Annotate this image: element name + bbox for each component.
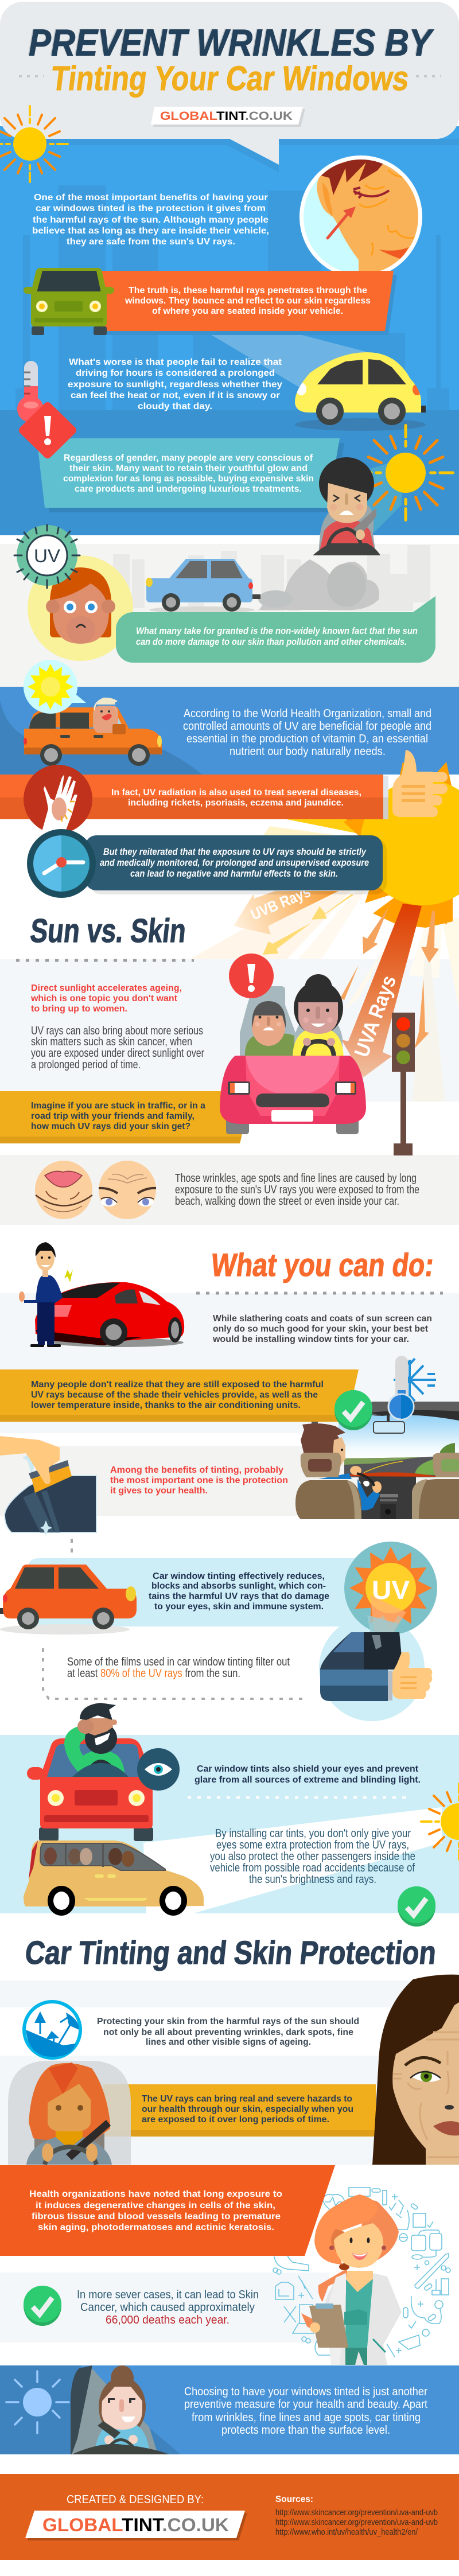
panel: footer xyxy=(0,2474,459,2560)
panel: gray tinting benefit band xyxy=(0,1433,459,1516)
text block: UV rays serious xyxy=(31,1025,204,1071)
panel: teal vanity box: their skin. Many want to retain their youthful glow and xyxy=(69,464,308,473)
panel: green speech callout: What many take for granted is the non-widely known fact that the sun xyxy=(136,625,418,636)
icon: check mark xyxy=(398,1886,435,1927)
panel: what you can do background: only do so much good for your skin, your best bet xyxy=(213,1324,429,1334)
title xyxy=(19,21,441,98)
text block: UV rays serious: skin matters such as skin cancer, when xyxy=(31,1036,192,1048)
panel: light blue eyes band: By installing car tints, you don't only give your xyxy=(215,1827,411,1840)
panel: wrinkles band xyxy=(0,1155,459,1225)
panel: what you can do background: While slathering coats and coats of sun screen can xyxy=(213,1314,432,1324)
icon: sun with beam xyxy=(356,426,453,534)
icon: couple in pink car xyxy=(220,974,366,1134)
arrow: UVA rays: UVA Rays xyxy=(349,972,400,1060)
panel: light blue tint band: to your eyes, skin and immune system. xyxy=(154,1602,324,1612)
logo: GLOBAL TINT .CO.UK xyxy=(160,110,293,123)
icon: orange car with man xyxy=(24,698,162,766)
panel: navy exposure callout xyxy=(85,835,387,894)
arrow: small yellow rays xyxy=(263,894,353,955)
panel: skin protection background: Protecting your skin from the harmful rays of the sun should xyxy=(97,2017,359,2026)
text block: intro: car windows tinted is the protection it gives from xyxy=(36,204,266,213)
panel: yellow traffic banner xyxy=(0,1091,252,1143)
panel: skin cancer callout: Cancer, which caused approximately xyxy=(80,2301,255,2314)
panel: what you can do background xyxy=(0,1293,459,1433)
panel: orange band diseases: including rickets, psoriasis, eczema and jaundice. xyxy=(128,798,344,808)
panel: light blue eyes band: you also protect the other passengers inside the xyxy=(210,1850,415,1863)
text block: UV rays serious: you are exposed under direct sunlight over xyxy=(31,1047,204,1060)
panel: light blue tint band xyxy=(28,1558,367,1626)
panel: yellow traffic banner: road trip with your friends and family, xyxy=(31,1111,195,1121)
icon: car interior with driver xyxy=(295,1402,459,1519)
panel: closing blue band: from wrinkles, fine lines and age spots, car tinting xyxy=(192,2411,421,2424)
panel: World Health Organization blue band: nutrient our body naturally needs. xyxy=(230,745,386,758)
connector: dashed line xyxy=(71,1539,73,1562)
speech bubble header xyxy=(0,2,459,165)
text block: UV rays serious: UV rays can also bring about more serious xyxy=(31,1025,203,1037)
icon: traffic light xyxy=(392,1013,415,1155)
panel: skin protection background xyxy=(0,1980,459,2165)
panel: light blue eyes band: glare from all sources of extreme and blinding light. xyxy=(195,1775,421,1785)
text block: intro: they are safe from the sun's UV rays. xyxy=(67,237,235,247)
panel: what you can do background: would be installing window tints for your car. xyxy=(212,1334,409,1344)
icon: pale sun xyxy=(6,2371,69,2433)
panel: yellow hazard band: The UV rays can bring real and severe hazards to xyxy=(142,2094,352,2104)
panel: navy exposure callout: But they reiterated that the exposure to UV rays should be strictly xyxy=(103,846,367,857)
panel: orange health organizations banner: skin aging, photodermatoses and actinic keratosis. xyxy=(38,2223,274,2232)
icon: aged woman face xyxy=(372,1975,459,2165)
icon: red car with man xyxy=(19,1242,184,1347)
panel: yellow hazard band: are exposed to it over long periods of time. xyxy=(142,2115,329,2124)
icon: warning diamond xyxy=(23,406,72,454)
icon: UV badge xyxy=(14,525,80,588)
panel: footer: Sources: xyxy=(275,2495,313,2504)
panel: white strip and pollution section xyxy=(0,535,459,687)
panel: yellow hazard band: our health through our skin, especially when you xyxy=(142,2104,353,2114)
big sun with pale rays xyxy=(189,740,459,1102)
panel: closing blue band: protects more than the surface level. xyxy=(221,2424,390,2437)
panel: skin protection background: lines and other visible signs of ageing. xyxy=(146,2037,311,2047)
panel: closing blue band xyxy=(0,2365,459,2454)
icon: sun top left xyxy=(0,106,68,182)
panel: light blue tint band: Car window tinting effectively reduces, xyxy=(153,1571,325,1581)
panel: yellow shade banner xyxy=(0,1369,359,1422)
text block: films filter 80% xyxy=(67,1656,290,1680)
panel: yellow shade banner: Many people don't realize that they are still exposed to the harmful xyxy=(31,1380,324,1390)
panel: light blue eyes band: vehicle from possible road accidents because of xyxy=(210,1862,415,1874)
panel: gray tinting benefit band: it gives to your health. xyxy=(110,1486,208,1496)
panel: orange truth banner xyxy=(98,271,397,335)
icon: check mark xyxy=(24,2286,61,2326)
icon: medical outline icons xyxy=(273,2188,450,2357)
icon: driver blocking glare in red car xyxy=(27,1703,153,1841)
icon: check mark xyxy=(334,1390,372,1430)
icon: UV window reflection xyxy=(24,2002,80,2058)
panel: closing blue band: preventive measure for your health and beauty. Apart xyxy=(184,2398,427,2411)
icon: red haired driver xyxy=(8,2061,131,2165)
arrow: UVB rays: UVB Rays xyxy=(248,883,313,924)
arrow: UVA rays xyxy=(341,904,422,1077)
panel: World Health Organization blue band xyxy=(0,687,459,775)
arrow: UVB rays xyxy=(234,883,339,935)
icon: hand holding UV sun xyxy=(319,1542,437,1721)
text block: what's worse: cloudy that day. xyxy=(138,402,212,411)
panel: light blue eyes band xyxy=(0,1735,459,1913)
panel: teal vanity box: complexion for as long as possible, buying expensive skin xyxy=(63,474,314,484)
text block: direct sunlight: which is one topic you don't want xyxy=(30,994,178,1003)
icon: worried woman xyxy=(28,555,133,661)
panel: skin protection background: not only be all about preventing wrinkles, dark spots, fine xyxy=(103,2028,353,2037)
panel: teal vanity box: care products and undergoing luxurious treatments. xyxy=(75,484,302,494)
text block: direct sunlight xyxy=(30,983,182,1014)
panel: wrinkles band: beach, walking down the street or even inside your car. xyxy=(175,1195,399,1208)
icon: cold thermometer and snowflake xyxy=(388,1356,436,1419)
panel: orange health organizations banner: fibrous tissue and blood vessels leading to premature xyxy=(32,2212,281,2221)
panel: orange truth banner: The truth is, these harmful rays penetrates through the xyxy=(129,286,367,295)
text block: what's worse xyxy=(68,357,282,411)
panel: World Health Organization blue band: According to the World Health Organization, small and xyxy=(184,707,431,720)
panel: yellow shade banner: lower temperature inside, thanks to the air conditioning units. xyxy=(31,1400,301,1410)
icon: wrinkled forehead face xyxy=(99,1161,156,1219)
text block: films filter 80%: Some of the films used in car window tinting filter out xyxy=(67,1656,290,1668)
panel: green speech callout xyxy=(116,596,435,663)
icon: doctor xyxy=(301,2194,402,2365)
panel: World Health Organization blue band: controlled amounts of UV are beneficial for people and xyxy=(183,720,431,733)
icon: wrinkled face in mirror xyxy=(299,155,425,281)
panel: orange health organizations banner: it induces degenerative changes in cells of the skin, xyxy=(36,2201,275,2211)
panel: light blue eyes band: Car window tints also shield your eyes and prevent xyxy=(197,1764,419,1774)
icon: sun right edge xyxy=(421,1784,459,1859)
text block: intro: the harmful rays of the sun. Although many people xyxy=(33,215,269,225)
icon: alert circle xyxy=(229,954,274,998)
icon: hand with rash xyxy=(24,765,92,838)
icon: thermometer xyxy=(17,361,44,422)
icon: sun speech bubble xyxy=(24,660,86,714)
icon: yellow car xyxy=(295,352,426,431)
panel: skin cancer callout xyxy=(0,2273,329,2342)
text block: direct sunlight: Direct sunlight accelerates ageing, xyxy=(31,983,182,993)
text block: intro xyxy=(32,193,269,247)
panel: light blue tint band: blocks and absorbs sunlight, which con- xyxy=(151,1581,326,1591)
text block: what's worse: driving for hours is considered a prolonged xyxy=(76,368,275,378)
icon: clock xyxy=(27,829,96,898)
icon: orange car xyxy=(0,1565,137,1635)
panel: yellow traffic banner: Imagine if you are stuck in traffic, or in a xyxy=(31,1101,205,1111)
panel: intro blue city background xyxy=(0,126,459,535)
text block: intro: One of the most important benefits of having your xyxy=(34,193,268,203)
panel: gray tinting benefit band: the most important one is the protection xyxy=(110,1476,288,1485)
icon: hand tinting window xyxy=(0,1436,96,1536)
arrow: small orange rays xyxy=(340,906,439,1049)
panel: closing blue band: Choosing to have your windows tinted is just another xyxy=(184,2386,427,2398)
panel: orange band diseases xyxy=(0,775,383,819)
panel: gray tinting benefit band: Among the benefits of tinting, probably xyxy=(110,1465,283,1475)
icon: blue car with smoke xyxy=(146,559,379,613)
text block: what's worse: exposure to sunlight, regardless whether they xyxy=(68,380,282,390)
connector: dotted path xyxy=(43,1648,302,1699)
icon: smiling woman driver xyxy=(71,2365,169,2454)
icon: squinting driver xyxy=(313,457,380,555)
panel: orange truth banner: windows. They bounce and reflect to our skin regardless xyxy=(125,296,371,306)
headlight beam xyxy=(205,331,366,390)
icon: wrinkled mouth face xyxy=(35,1161,92,1219)
panel: orange band diseases: In fact, UV radiation is also used to treat several diseases, xyxy=(111,788,361,797)
icon: hand holding UV sun: UV xyxy=(372,1575,410,1605)
panel: orange health organizations banner xyxy=(0,2165,335,2256)
footer logo: GLOBALTINT.CO.UK xyxy=(42,2515,229,2535)
panel: orange truth banner: of where you are seated inside your vehicle. xyxy=(152,306,343,316)
panel: green speech callout: can do more damage to our skin than pollution and other chemicals. xyxy=(136,636,407,647)
panel: Sun vs Skin background xyxy=(0,959,459,1102)
panel: footer: CREATED & DESIGNED BY: xyxy=(67,2493,204,2506)
panel: yellow shade banner: UV rays because of the shade their vehicles provide, as well as the xyxy=(31,1390,318,1400)
panel: footer: http://www.who.int/uv/health/uv_health2/en/ xyxy=(275,2527,418,2537)
icon: green car front xyxy=(24,268,114,335)
panel: yellow traffic banner: how much UV rays did your skin get? xyxy=(31,1122,190,1131)
logo xyxy=(151,107,305,127)
panel: teal vanity box: Regardless of gender, many people are very conscious of xyxy=(64,453,313,463)
icon: eye circle xyxy=(137,1748,180,1791)
icon: UV badge: UV xyxy=(34,546,61,566)
panel: skin cancer callout: 66,000 deaths each year. xyxy=(106,2314,230,2326)
panel: navy exposure callout: and medically monitored, for prolonged and unsupervised exposure xyxy=(100,857,369,868)
heading: Sun vs. Skin: Sun vs. Skin xyxy=(29,912,188,950)
panel: orange health organizations banner: Health organizations have noted that long exposure to xyxy=(29,2189,282,2199)
panel: teal vanity box xyxy=(37,438,344,512)
text block: what's worse: can feel the heat or not, even if it is snowy or xyxy=(71,391,280,400)
text block: what's worse: What's worse is that people fail to realize that xyxy=(69,357,282,367)
panel: light blue eyes band: the sun's brightness and rays. xyxy=(249,1873,376,1886)
text block: direct sunlight: to bring up to women. xyxy=(31,1004,127,1014)
text block: intro: believe that as long as they are inside their vehicle, xyxy=(32,226,269,236)
panel: World Health Organization blue band: essential in the production of vitamin D, an essential xyxy=(186,733,428,745)
text block: films filter 80%: at least 80% of the UV rays from the sun. xyxy=(67,1667,240,1680)
panel: light blue tint band: tains the harmful UV rays that do damage xyxy=(149,1591,329,1601)
panel: navy exposure callout: can lead to negative and harmful effects to the skin. xyxy=(130,868,338,879)
panel: skin cancer callout: In more sever cases, it can lead to Skin xyxy=(77,2289,259,2301)
icon: thumbs up xyxy=(383,750,448,819)
panel: light blue eyes band: eyes some extra protection from the UV rays, xyxy=(216,1839,409,1851)
footer logo xyxy=(25,2511,247,2540)
text block: UV rays serious: a prolonged period of time. xyxy=(31,1059,141,1071)
panel: yellow hazard band xyxy=(103,2084,376,2137)
icon: family van xyxy=(24,1840,204,1916)
